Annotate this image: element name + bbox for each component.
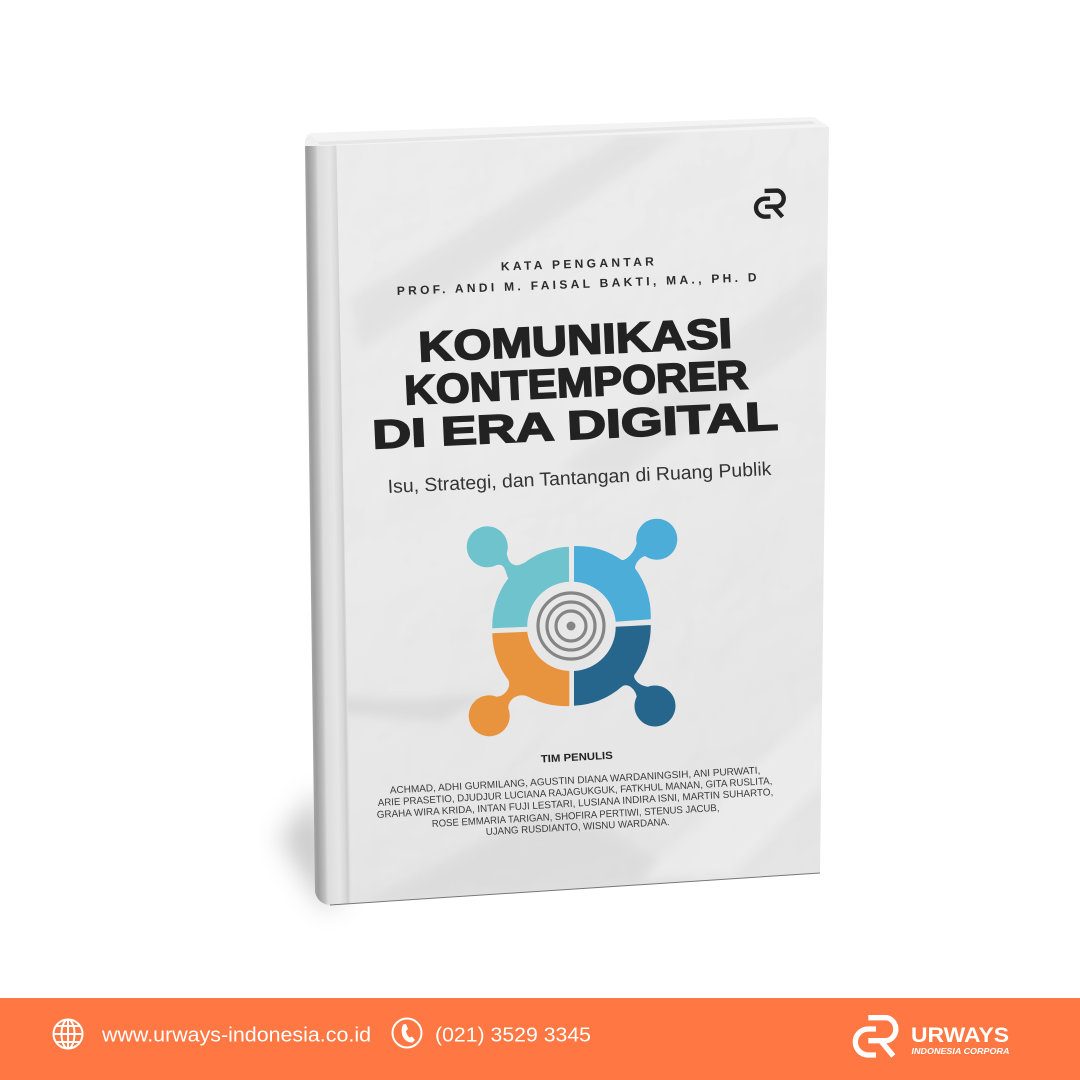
book title (371, 309, 779, 457)
crumpled paper texture (300, 120, 835, 910)
authors line 4: ROSE EMMARIA TARIGAN, SHOFIRA PERTIWI, STENUS JACUB, (432, 803, 720, 830)
page block top (305, 117, 829, 147)
title line 1: KOMUNIKASI (417, 309, 733, 370)
logo mark R (765, 190, 784, 217)
authors list (377, 765, 774, 838)
authors line 2: ARIE PRASETIO, DJUDJUR LUCIANA RAJAGUKGUK, FATKHUL MANAN, GITA RUSLITA, (378, 776, 773, 809)
cover base colour (300, 120, 835, 910)
footer logo (855, 1018, 896, 1056)
soft paper creases (330, 135, 825, 905)
logo mark C (756, 199, 771, 217)
cover surface (300, 120, 835, 910)
footer bar (0, 998, 1080, 1080)
spine top rim (305, 136, 322, 146)
logo mark R (868, 1018, 896, 1056)
brand name: URWAYS (911, 1024, 1009, 1047)
phone ring (392, 1018, 422, 1048)
icon: globe (54, 1020, 82, 1048)
authors heading: TIM PENULIS (541, 750, 613, 765)
title line 2: KONTEMPORER (403, 352, 749, 413)
blue segment (574, 519, 677, 622)
cover logo (756, 190, 784, 218)
brand tagline: INDONESIA CORPORA (912, 1046, 1010, 1056)
logo mark C (855, 1029, 876, 1055)
concentric rings (538, 593, 604, 659)
center dot (566, 622, 576, 630)
bottom edge line (330, 873, 820, 905)
title line 3: DI ERA DIGITAL (371, 394, 779, 457)
orange segment (469, 632, 569, 736)
phone handset (402, 1024, 415, 1043)
top edge shading (312, 121, 816, 145)
authors line 5: UJANG RUSDIANTO, WISNU WARDANA. (486, 817, 670, 838)
dark blue segment (574, 625, 675, 726)
icon: phone (392, 1018, 422, 1048)
target diagram (467, 519, 677, 736)
footer background (0, 998, 1080, 1080)
subtitle: Isu, Strategi, dan Tantangan di Ruang Publik (387, 459, 772, 498)
foreword label: KATA PENGANTAR (501, 254, 654, 273)
book cast shadow (280, 790, 340, 908)
authors line 1: ACHMAD, ADHI GURMILANG, AGUSTIN DIANA WARDANINGSIH, ANI PURWATI, (390, 765, 761, 796)
foreword author: PROF. ANDI M. FAISAL BAKTI, MA., PH. D (397, 270, 757, 298)
teal segment (467, 526, 569, 628)
book mockup (300, 117, 835, 910)
spine and hinge (305, 136, 350, 904)
phone number: (021) 3529 3345 (435, 1024, 591, 1046)
website address: www.urways-indonesia.co.id (101, 1024, 371, 1046)
authors line 3: GRAHA WIRA KRIDA, INTAN FUJI LESTARI, LUSIANA INDIRA ISNI, MARTIN SUHARTO, (377, 787, 774, 821)
